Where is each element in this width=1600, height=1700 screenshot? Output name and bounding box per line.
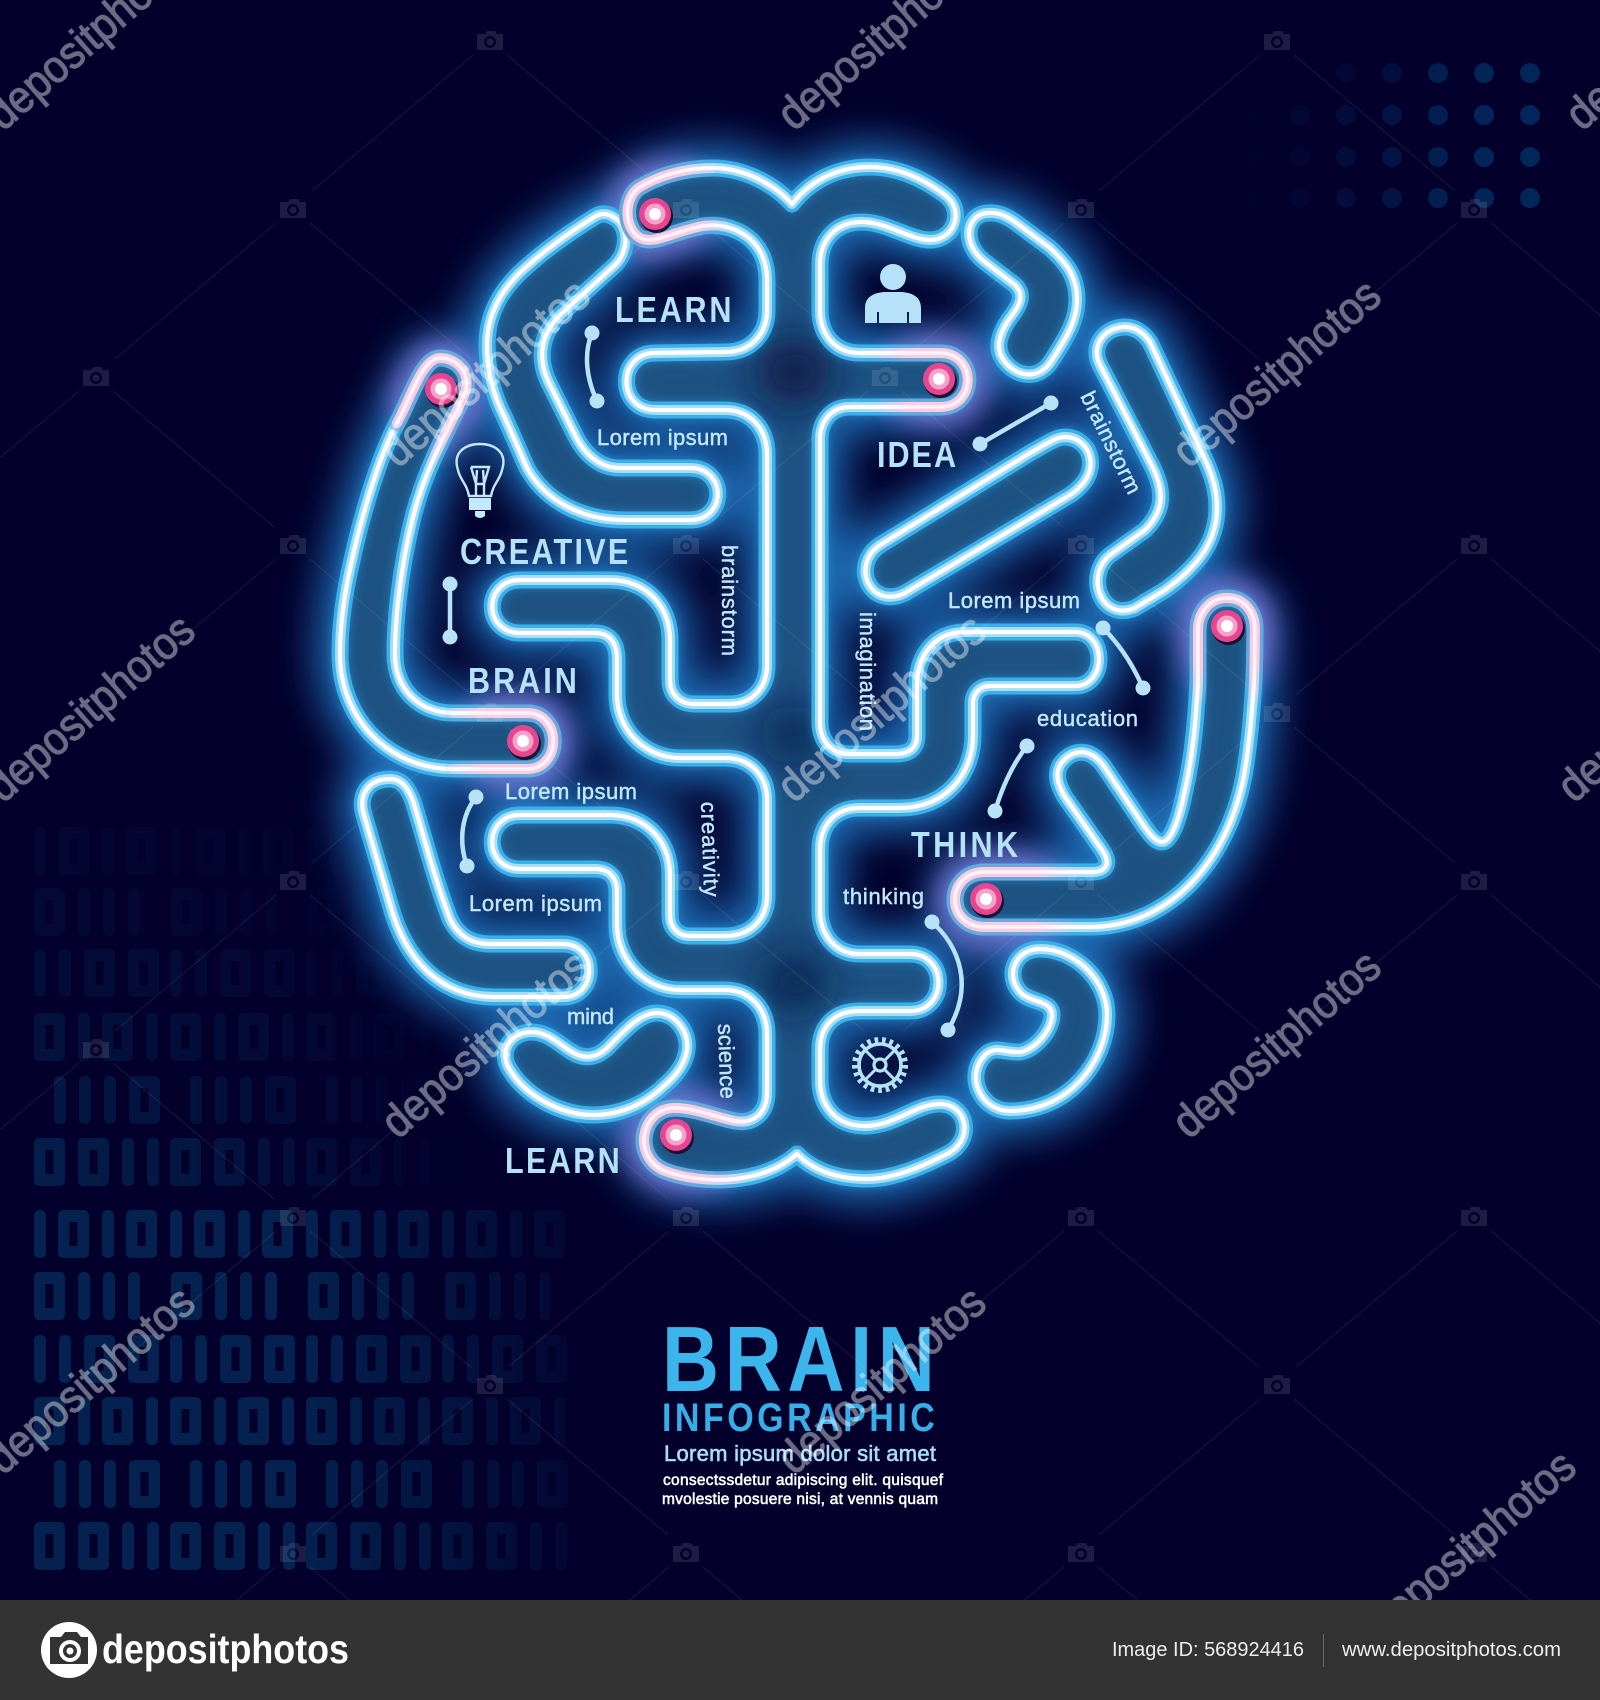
labels: right hemisphere: imagination [855, 612, 880, 731]
title block [662, 1308, 944, 1508]
labels: left hemisphere: mind [567, 1004, 614, 1029]
connector lines [442, 326, 1150, 1038]
footer logo wordmark: depositphotos [102, 1626, 349, 1672]
brain: outer glow [340, 167, 1255, 1180]
title block: Lorem ipsum dolor sit amet [664, 1441, 936, 1466]
pattern: binary digits, lower block [34, 1210, 570, 1570]
title block: INFOGRAPHIC [662, 1394, 935, 1440]
icon: person [865, 264, 921, 323]
pink node dots [425, 198, 1245, 1154]
pattern: faded dot grid top right [1243, 63, 1540, 208]
title block: mvolestie posuere nisi, at vennis quam [662, 1491, 938, 1508]
watermark: depositphotos text: depositphotos [1162, 269, 1390, 477]
labels: left hemisphere: Lorem ipsum [597, 425, 728, 450]
watermark: depositphotos text: depositphotos [371, 269, 599, 477]
labels: left hemisphere: BRAIN [468, 662, 577, 702]
labels: left hemisphere: Lorem ipsum [469, 891, 602, 916]
pink tube sections around the nodes [397, 168, 1255, 1180]
labels: left hemisphere: creativity [696, 801, 724, 897]
labels: left hemisphere: CREATIVE [460, 533, 628, 573]
footer logo icon [41, 1622, 97, 1678]
icon: light bulb [457, 444, 503, 518]
labels: right hemisphere: thinking [843, 884, 924, 909]
labels: left hemisphere: brainstorm [717, 545, 742, 656]
footer image id: Image ID: 568924416 [1112, 1639, 1304, 1661]
labels: left hemisphere: science [713, 1023, 741, 1099]
labels: right hemisphere: Lorem ipsum [948, 588, 1080, 613]
labels: left hemisphere [460, 291, 742, 1182]
labels: right hemisphere: THINK [911, 826, 1018, 866]
labels: left hemisphere: LEARN [505, 1142, 620, 1182]
watermark: depositphotos text: depositphotos [1162, 940, 1390, 1148]
labels: right hemisphere: IDEA [877, 436, 956, 476]
brain: filled corridors [340, 167, 1255, 1180]
title block: BRAIN [662, 1308, 935, 1411]
brain: neon tubes [340, 167, 1255, 1180]
watermark: depositphotos text: depositphotos [1357, 1440, 1585, 1648]
watermark: depositphotos text: depositphotos [767, 1276, 995, 1484]
labels: right hemisphere: brainstorm [1076, 387, 1147, 498]
brain: soft light spill from the tubes [340, 167, 1255, 1180]
labels: right hemisphere: education [1037, 706, 1138, 731]
pattern: binary digits, upper faded block [34, 888, 366, 1186]
brain: dark shading inside central column [756, 338, 832, 1012]
icon: gear [855, 1040, 905, 1090]
footer bar [0, 1600, 1600, 1700]
labels: left hemisphere: LEARN [615, 291, 731, 331]
labels: right hemisphere [843, 387, 1147, 909]
title block: consectssdetur adipiscing elit. quisquef [663, 1472, 944, 1489]
labels: left hemisphere: Lorem ipsum [505, 779, 637, 804]
watermark: depositphotos text: depositphotos [767, 604, 995, 812]
watermark: depositphotos text: depositphotos [371, 940, 599, 1148]
footer site url: www.depositphotos.com [1341, 1639, 1561, 1661]
